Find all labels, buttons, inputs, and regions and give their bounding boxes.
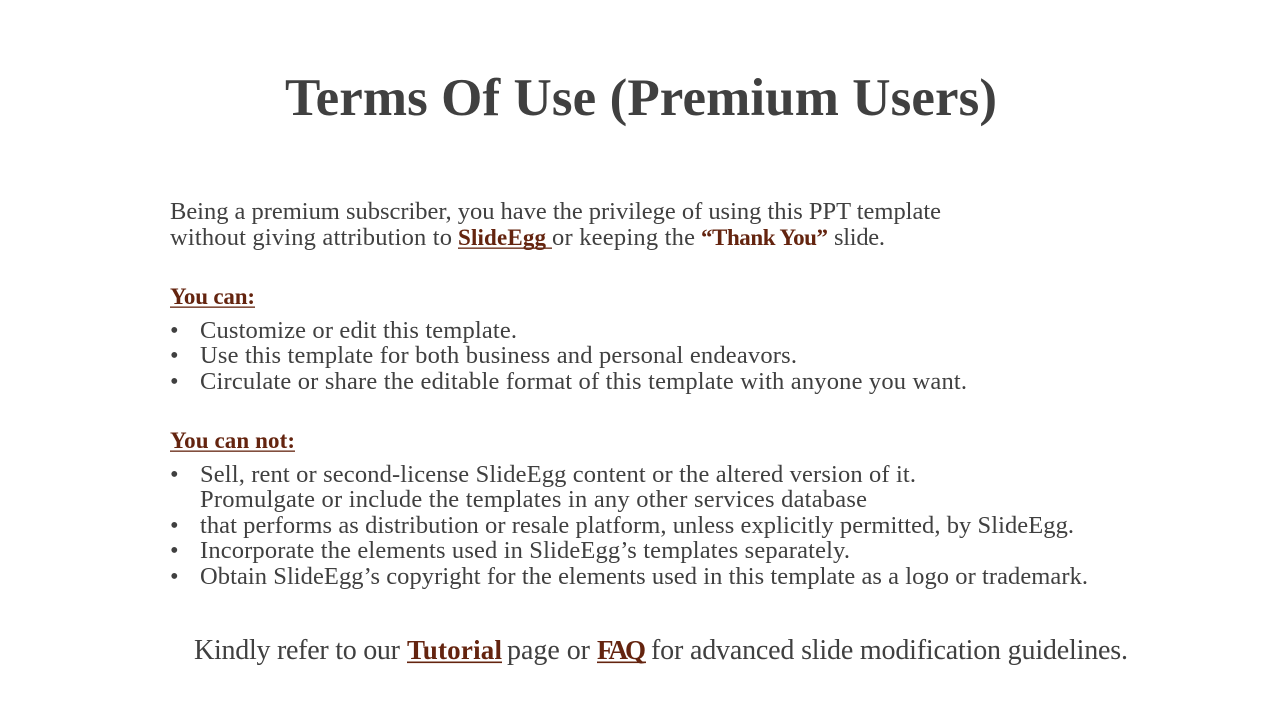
list: you can: • (170, 342, 179, 369)
list: you can not: Obtain SlideEgg’s copyright for the elements used in this template as a logo or trademark. (200, 563, 1088, 590)
footer note: for advanced slide modification guidelines. (651, 635, 1128, 666)
list: you can: • (170, 368, 179, 395)
list: you can not: • (170, 563, 179, 590)
text block: introduction: “Thank You” (701, 225, 828, 250)
text block: introduction: without giving attribution to (170, 224, 452, 251)
text block: introduction: SlideEgg (458, 225, 546, 250)
footer note: FAQ (597, 635, 646, 665)
text block: introduction: or keeping the (552, 224, 695, 251)
text block: introduction (170, 198, 941, 251)
list: you can: Use this template for both business and personal endeavors. (200, 342, 797, 369)
heading: you can: You can: (170, 284, 255, 309)
footer note (194, 635, 1128, 666)
text block: introduction: slide. (834, 224, 885, 251)
list: you can: • (170, 317, 179, 344)
list: you can not (170, 461, 1088, 590)
list: you can not: • (170, 537, 179, 564)
footer note: Tutorial (407, 635, 502, 665)
list: you can: Customize or edit this template. (200, 317, 517, 344)
footer note: page or (507, 635, 591, 666)
text block: introduction: Being a premium subscriber, you have the privilege of using this PPT template (170, 198, 941, 225)
heading: you can not: You can not: (170, 428, 295, 453)
list: you can not: that performs as distribution or resale platform, unless explicitly permitted, by SlideEgg. (200, 512, 1074, 539)
title: Terms Of Use (Premium Users) (285, 69, 997, 127)
footer note: Kindly refer to our (194, 635, 401, 666)
list: you can not: Sell, rent or second-license SlideEgg content or the altered version of it. (200, 461, 916, 488)
list: you can not: Promulgate or include the templates in any other services database (200, 486, 867, 513)
list: you can not: Incorporate the elements used in SlideEgg’s templates separately. (200, 537, 850, 564)
list: you can (170, 317, 967, 395)
list: you can not: • (170, 461, 179, 488)
list: you can: Circulate or share the editable format of this template with anyone you want. (200, 368, 967, 395)
list: you can not: • (170, 512, 179, 539)
